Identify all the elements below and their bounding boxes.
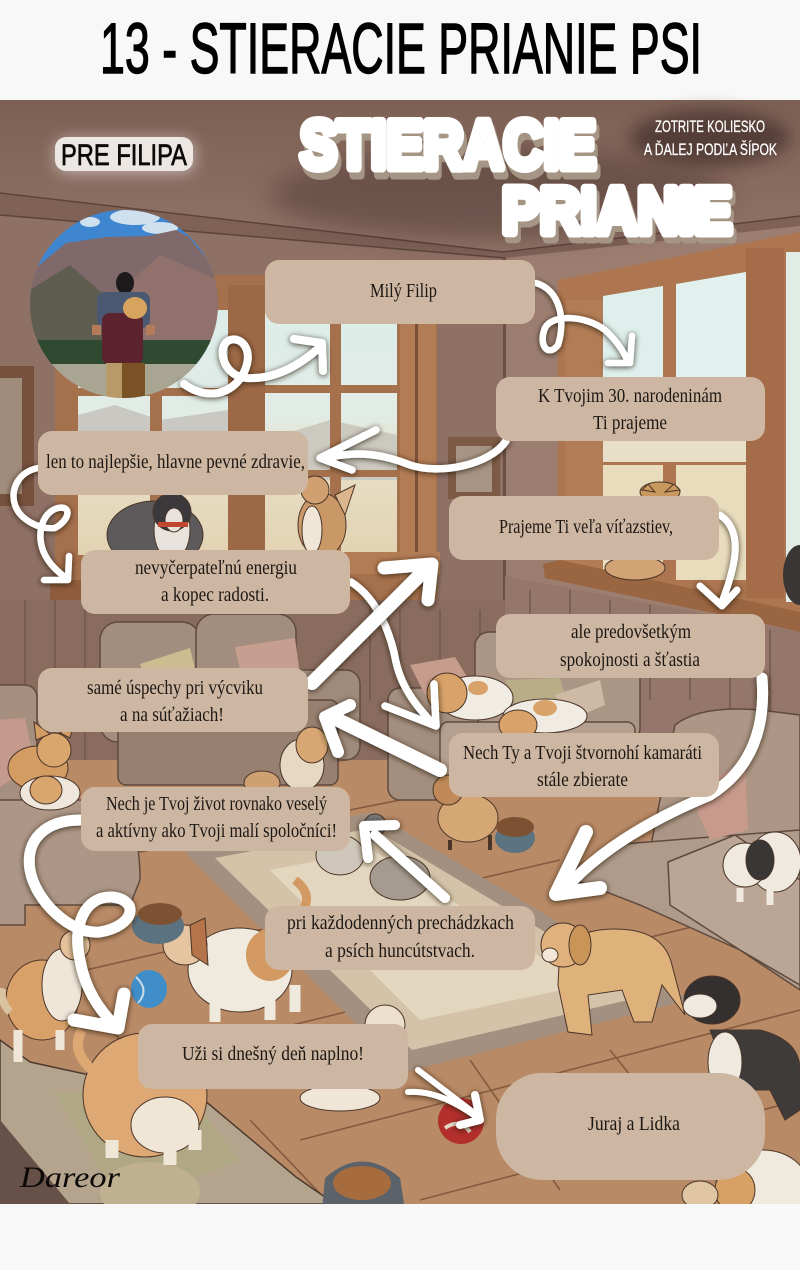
bowl: front grey xyxy=(322,1162,404,1204)
instruction text xyxy=(630,110,790,166)
note: K Tvojim 30. narodeninám: K Tvojim 30. narodeninám xyxy=(538,385,722,407)
dog: sleeping white pups on sofa xyxy=(427,673,513,720)
dog: at right window xyxy=(640,482,681,496)
photo of hiker with dog in circle xyxy=(30,209,218,400)
heading: PRIANIE: PRIANIE xyxy=(505,180,735,253)
dog: lying under note xyxy=(300,1005,405,1111)
note: ale predovšetkým xyxy=(496,614,765,678)
clouds xyxy=(80,209,178,234)
wood panelling xyxy=(24,576,798,760)
dog: left standing xyxy=(2,930,90,1062)
sticker: PRE FILIPA: PRE FILIPA xyxy=(61,139,187,172)
arrow: len to to nevyčerpateľnú xyxy=(14,468,69,580)
ball: red xyxy=(438,1098,484,1144)
right window xyxy=(543,232,800,632)
ball: blue xyxy=(131,970,167,1008)
arrow: Nech Ty to samé úspechy xyxy=(325,705,440,770)
hiker with backpack and puppy xyxy=(92,272,155,399)
note: Nech je Tvoj život: a aktívny ako Tvoji malí spoločníci! xyxy=(96,820,337,842)
note: Nech je Tvoj život: Nech je Tvoj život rovnako veselý xyxy=(106,793,327,815)
dog: orange foreground xyxy=(78,1030,207,1165)
note: pri každodenných: pri každodenných prechádzkach xyxy=(287,912,514,934)
note: Milý Filip xyxy=(265,260,535,324)
dog: tan at window xyxy=(298,476,355,557)
walls xyxy=(0,192,800,632)
note: ale predovšetkým: spokojnosti a šťastia xyxy=(560,649,700,671)
back sofa xyxy=(100,614,360,785)
dog: pup on right sofa xyxy=(723,832,800,905)
dog: bottom right pup xyxy=(682,1150,800,1204)
heading: STIERACIE: STIERACIE xyxy=(303,114,599,190)
arrow: pri každodenných to Nech je xyxy=(364,825,445,898)
dog: saint bernard xyxy=(244,727,328,795)
arrow: nevyčerpateľnú to Nech Ty xyxy=(351,582,436,726)
front sofa xyxy=(0,1039,324,1204)
sky xyxy=(30,210,218,300)
ground xyxy=(30,364,218,400)
note: nevyčerpateľnú energiu xyxy=(81,550,350,614)
arrow: Uži si to Juraj a Lidka xyxy=(408,1070,480,1125)
heading: STIERACIE: STIERACIE xyxy=(300,107,596,183)
mountains xyxy=(30,230,218,345)
note: Uži si dnešný deň xyxy=(138,1024,408,1089)
arrow: photo to Milý Filip xyxy=(184,339,323,394)
note: K Tvojim 30. narodeninám: Ti prajeme xyxy=(593,412,667,434)
note: samé úspechy xyxy=(38,668,308,732)
note: Nech je Tvoj život xyxy=(81,787,350,851)
dog: big golden xyxy=(541,923,685,1035)
note: Juraj a Lidka: Juraj a Lidka xyxy=(588,1113,680,1135)
note: len to najlepšie: len to najlepšie, hlavne pevné zdravie, xyxy=(46,451,305,473)
dogs xyxy=(2,476,800,1220)
dog: standing in front of sofa xyxy=(433,775,498,850)
left picture frames xyxy=(0,366,500,506)
note: Uži si dnešný deň: Uži si dnešný deň naplno! xyxy=(182,1043,364,1065)
dogs: grey pair on rug xyxy=(316,814,430,900)
note: samé úspechy: a na súťažiach! xyxy=(120,704,224,726)
bowl: left blue xyxy=(132,903,184,944)
arrow: samé úspechy to Prajeme xyxy=(312,564,432,683)
note: Juraj a Lidka xyxy=(496,1073,765,1180)
dark dog at window edge xyxy=(783,545,800,605)
right sofa xyxy=(575,709,800,990)
note: Nech Ty a Tvoji: Nech Ty a Tvoji štvornohí kamaráti xyxy=(463,742,702,764)
note: Nech Ty a Tvoji xyxy=(449,733,719,797)
left window xyxy=(50,275,440,602)
middle sofa xyxy=(388,632,640,800)
note: nevyčerpateľnú energiu: nevyčerpateľnú energiu xyxy=(135,557,297,579)
note: K Tvojim 30. narodeninám xyxy=(496,377,765,441)
arrow: ale predovšetkým to pri každodenných xyxy=(556,678,763,894)
forest xyxy=(30,340,218,364)
floor xyxy=(0,760,800,1210)
note: pri každodenných: a psích huncútstvach. xyxy=(325,940,475,962)
bowl: back blue xyxy=(495,817,535,853)
left sofa xyxy=(0,685,140,925)
note: Nech Ty a Tvoji: stále zbierate xyxy=(537,769,628,791)
signature: Dareor: Dareor xyxy=(19,1161,120,1194)
dark shade behind heading xyxy=(270,150,730,240)
note: pri každodenných xyxy=(265,906,535,970)
arrow: Milý Filip to K Tvojim xyxy=(536,283,632,363)
arrow: Prajeme to ale predovšetkým xyxy=(700,515,737,606)
note: nevyčerpateľnú energiu: a kopec radosti. xyxy=(161,584,269,606)
arrow: Nech je to Uži si xyxy=(29,820,130,1028)
note: len to najlepšie xyxy=(38,431,308,495)
heading: PRIANIE: PRIANIE xyxy=(502,174,732,247)
dog: grey at left window xyxy=(106,495,204,550)
ceiling xyxy=(0,100,800,270)
dog: border collie xyxy=(683,976,800,1120)
arrow: K Tvojim to len to xyxy=(320,430,506,470)
note: Prajeme Ti xyxy=(449,496,719,560)
dog: corgi pups on left sofa xyxy=(8,722,74,790)
note: Milý Filip: Milý Filip xyxy=(370,280,437,302)
dog: big white xyxy=(163,880,307,1022)
note: samé úspechy: samé úspechy pri výcviku xyxy=(87,677,263,699)
rug xyxy=(185,812,690,1072)
note: ale predovšetkým: ale predovšetkým xyxy=(571,621,691,643)
note: Prajeme Ti: Prajeme Ti veľa víťazstiev, xyxy=(499,516,673,538)
